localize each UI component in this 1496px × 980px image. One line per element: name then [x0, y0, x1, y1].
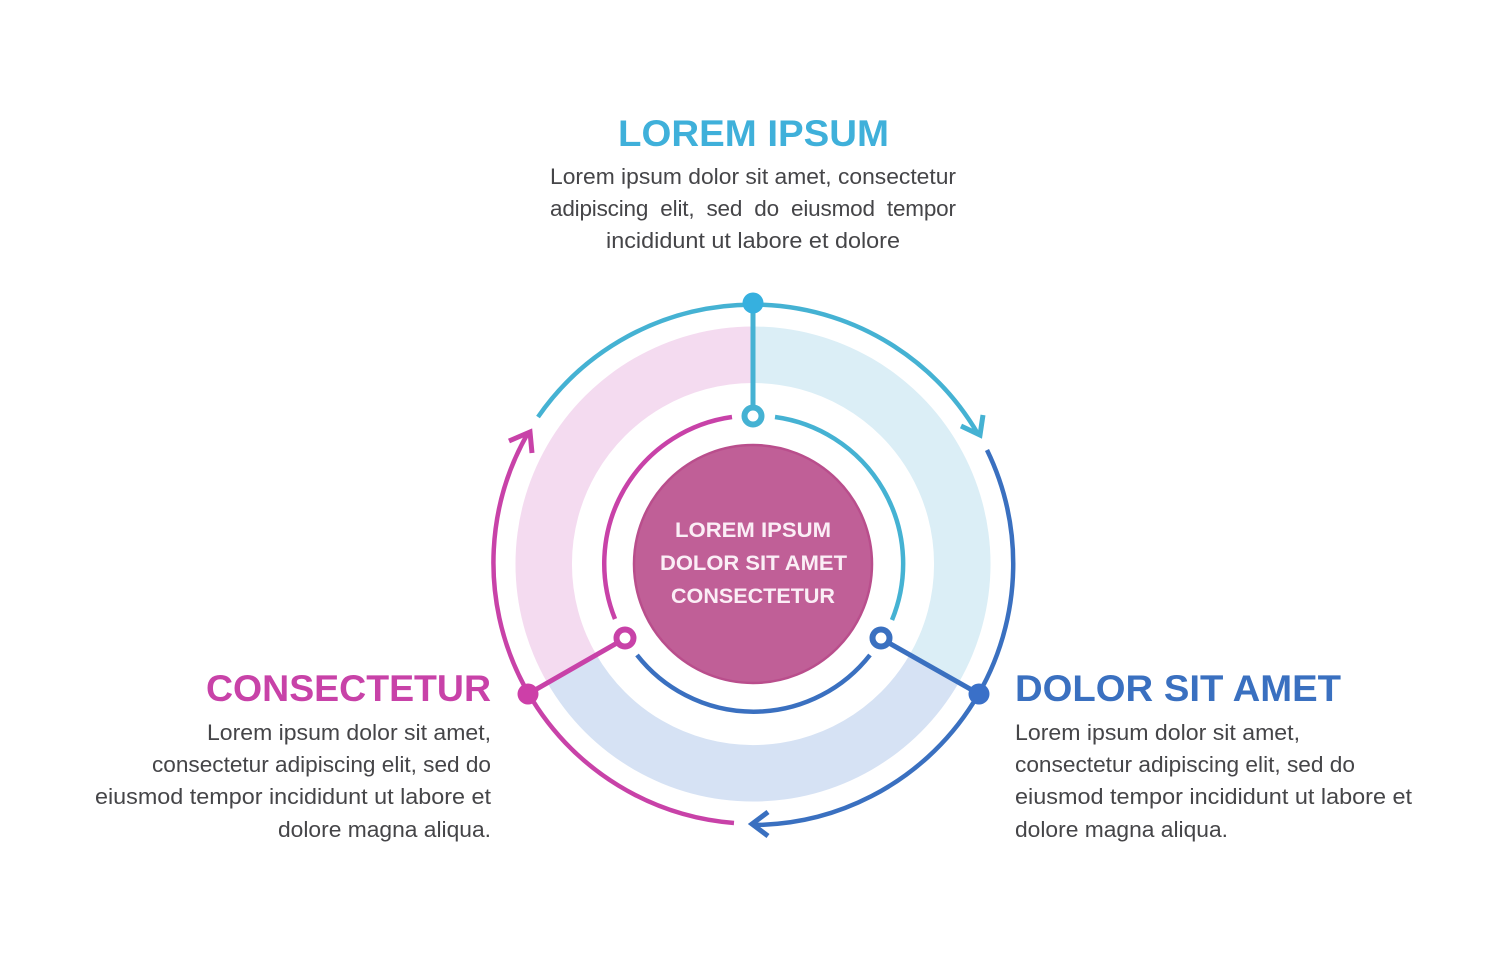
outer arc: teal [538, 305, 978, 434]
inner arc: blue [637, 655, 870, 712]
outer arc: magenta [493, 433, 734, 823]
dot: blue [968, 684, 990, 704]
center circle with label: CONSECTETUR [671, 585, 835, 608]
body: top [550, 164, 957, 253]
heading: top: LOREM IPSUM [618, 113, 889, 154]
connector: blue [889, 643, 979, 694]
body: right: dolore magna aliqua. [1015, 817, 1228, 842]
connector: teal [750, 303, 756, 407]
outer arc: blue [753, 450, 1013, 825]
body: left: eiusmod tempor incididunt ut labore et [95, 784, 492, 809]
body: left: consectetur adipiscing elit, sed do [152, 752, 491, 777]
center circle with label [634, 445, 872, 683]
step 1: teal arc, arrow and connector [538, 292, 983, 620]
text block: left [95, 668, 492, 842]
node: blue [872, 630, 890, 646]
arrowhead: magenta [509, 432, 532, 453]
body: top: Lorem ipsum dolor sit amet, consectetur [550, 164, 957, 189]
body: left: dolore magna aliqua. [278, 817, 491, 842]
segment: pink [515, 326, 753, 683]
connector: magenta [528, 643, 617, 694]
body: right: eiusmod tempor incididunt ut labore et [1015, 784, 1413, 809]
step 3: magenta arc, arrow and connector [493, 417, 734, 823]
dot: teal [742, 292, 764, 314]
center circle with label: LOREM IPSUM [675, 519, 831, 542]
body: right: Lorem ipsum dolor sit amet, [1015, 720, 1300, 745]
body: right: consectetur adipiscing elit, sed do [1015, 752, 1355, 777]
dot: magenta [518, 684, 538, 704]
heading: left: CONSECTETUR [206, 668, 491, 709]
body: top: incididunt ut labore et dolore [606, 228, 900, 253]
center circle with label: DOLOR SIT AMET [660, 552, 847, 575]
arrowhead: blue [752, 812, 768, 836]
inner arc: magenta [604, 417, 732, 619]
node: teal [744, 408, 762, 424]
text block: top [550, 113, 957, 253]
text block: right [1015, 668, 1413, 842]
ring of three pale segments [515, 326, 991, 802]
segment: periwinkle [547, 654, 959, 802]
step 2: blue arc, arrow and connector [637, 450, 1013, 836]
body: right [1015, 720, 1413, 842]
node: magenta [616, 630, 634, 646]
arrowhead: teal [961, 415, 983, 435]
body: top: adipiscing elit, sed do eiusmod tempor [550, 196, 956, 221]
inner arc: teal [775, 417, 903, 620]
segment: light blue [753, 326, 991, 683]
body: left [95, 720, 492, 842]
heading: right: DOLOR SIT AMET [1015, 668, 1341, 709]
body: left: Lorem ipsum dolor sit amet, [207, 720, 491, 745]
